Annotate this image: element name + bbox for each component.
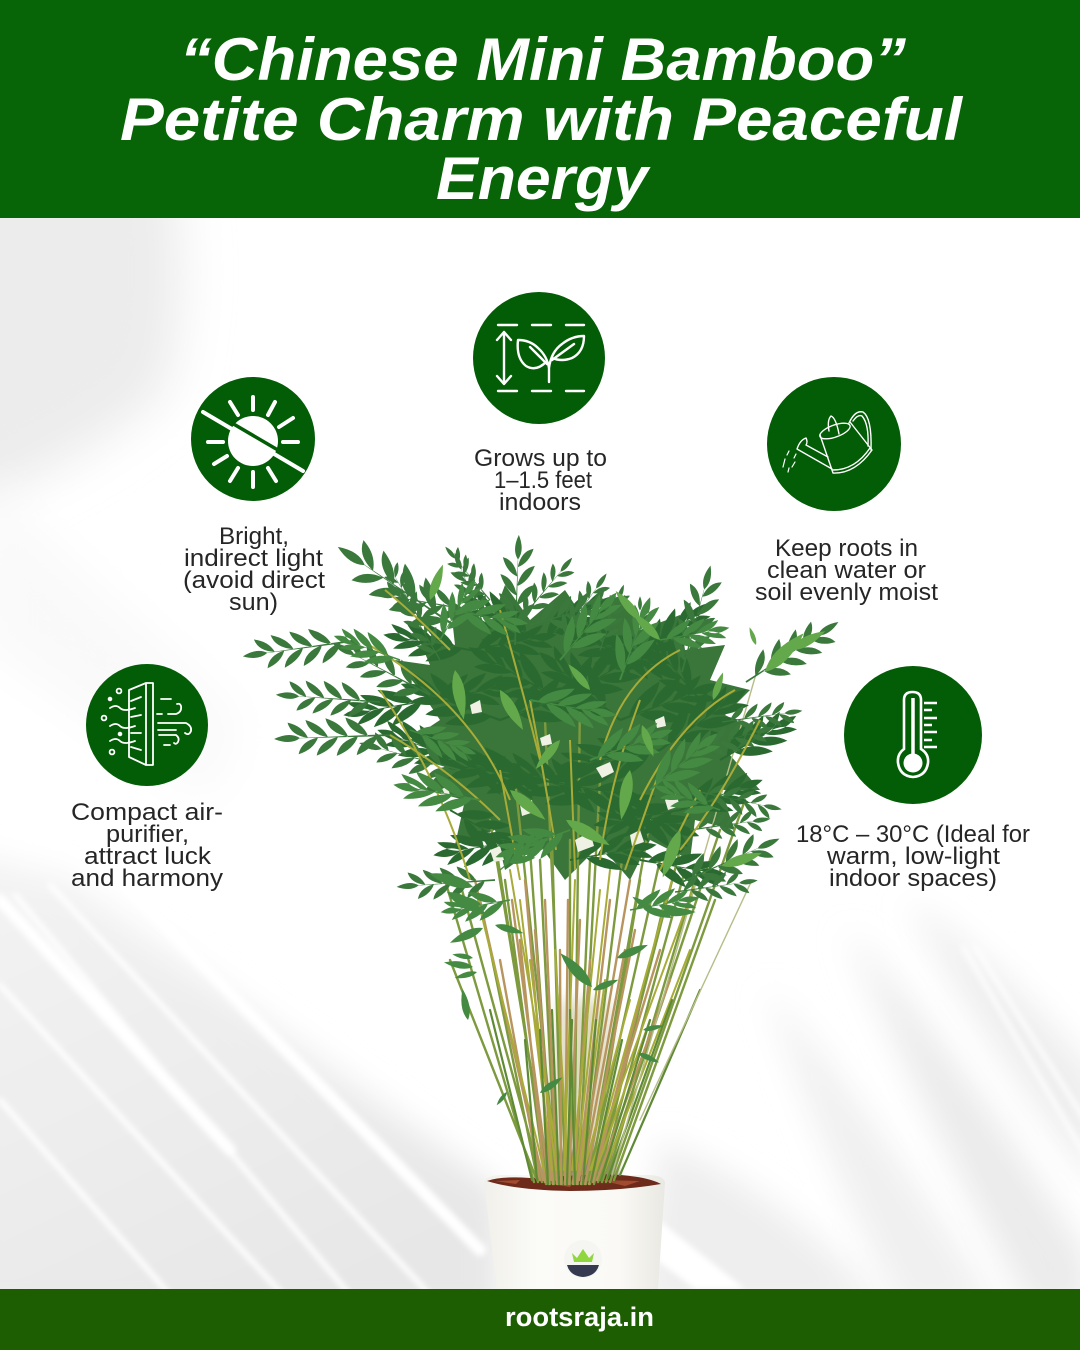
footer bar: [0, 1289, 1080, 1350]
stems: [445, 660, 760, 1184]
header banner: [0, 0, 1080, 218]
label: (avoid direct: [183, 567, 325, 594]
pot: [484, 1174, 665, 1289]
bright leaves: [426, 563, 827, 879]
feature: air purifier: [71, 664, 223, 892]
label: and harmony: [71, 865, 223, 892]
website url: rootsraja.in: [505, 1302, 654, 1332]
icon: crossed-out sun: [203, 397, 303, 487]
label: soil evenly moist: [755, 579, 938, 606]
label: indirect light: [184, 545, 323, 572]
icon: watering can: [783, 412, 872, 473]
label: [755, 535, 938, 606]
label: [71, 799, 223, 892]
label: indoor spaces): [829, 865, 997, 892]
stems over foliage: [360, 590, 760, 880]
plant photo: chinese mini bamboo: [240, 527, 848, 1289]
label: 18°C – 30°C (Ideal for: [796, 821, 1030, 848]
dark inner foliage: [340, 580, 806, 894]
label: 1–1.5 feet: [494, 467, 592, 494]
label: Grows up to: [474, 445, 607, 472]
label: Bright,: [219, 523, 289, 550]
label: warm, low-light: [826, 843, 1000, 870]
title: Petite Charm with Peaceful: [120, 86, 963, 153]
pot badge logo: [564, 1240, 602, 1278]
canopy mass: [395, 585, 765, 1180]
label: Keep roots in: [775, 535, 918, 562]
label: Compact air-: [71, 799, 223, 826]
title: “Chinese Mini Bamboo”: [180, 26, 906, 93]
feature: light: [183, 377, 325, 616]
label: purifier,: [106, 821, 189, 848]
leaves: [240, 527, 848, 1106]
icon: plant height: [497, 325, 584, 391]
feature: water: [755, 377, 938, 606]
label: [183, 523, 325, 616]
icon: thermometer: [898, 692, 937, 777]
feature: height: [473, 292, 607, 516]
title: [120, 26, 963, 212]
gaps between leaves: [440, 700, 680, 862]
label: attract luck: [84, 843, 212, 870]
label: indoors: [499, 489, 581, 516]
label: clean water or: [767, 557, 926, 584]
mid green foliage: [329, 571, 732, 1106]
outer pinnate fronds: [240, 527, 848, 906]
title: Energy: [436, 145, 651, 212]
icon: air filter: [102, 683, 191, 765]
label: sun): [229, 589, 278, 616]
label: [796, 821, 1030, 892]
feature: temperature: [796, 666, 1030, 892]
label: [474, 445, 607, 516]
